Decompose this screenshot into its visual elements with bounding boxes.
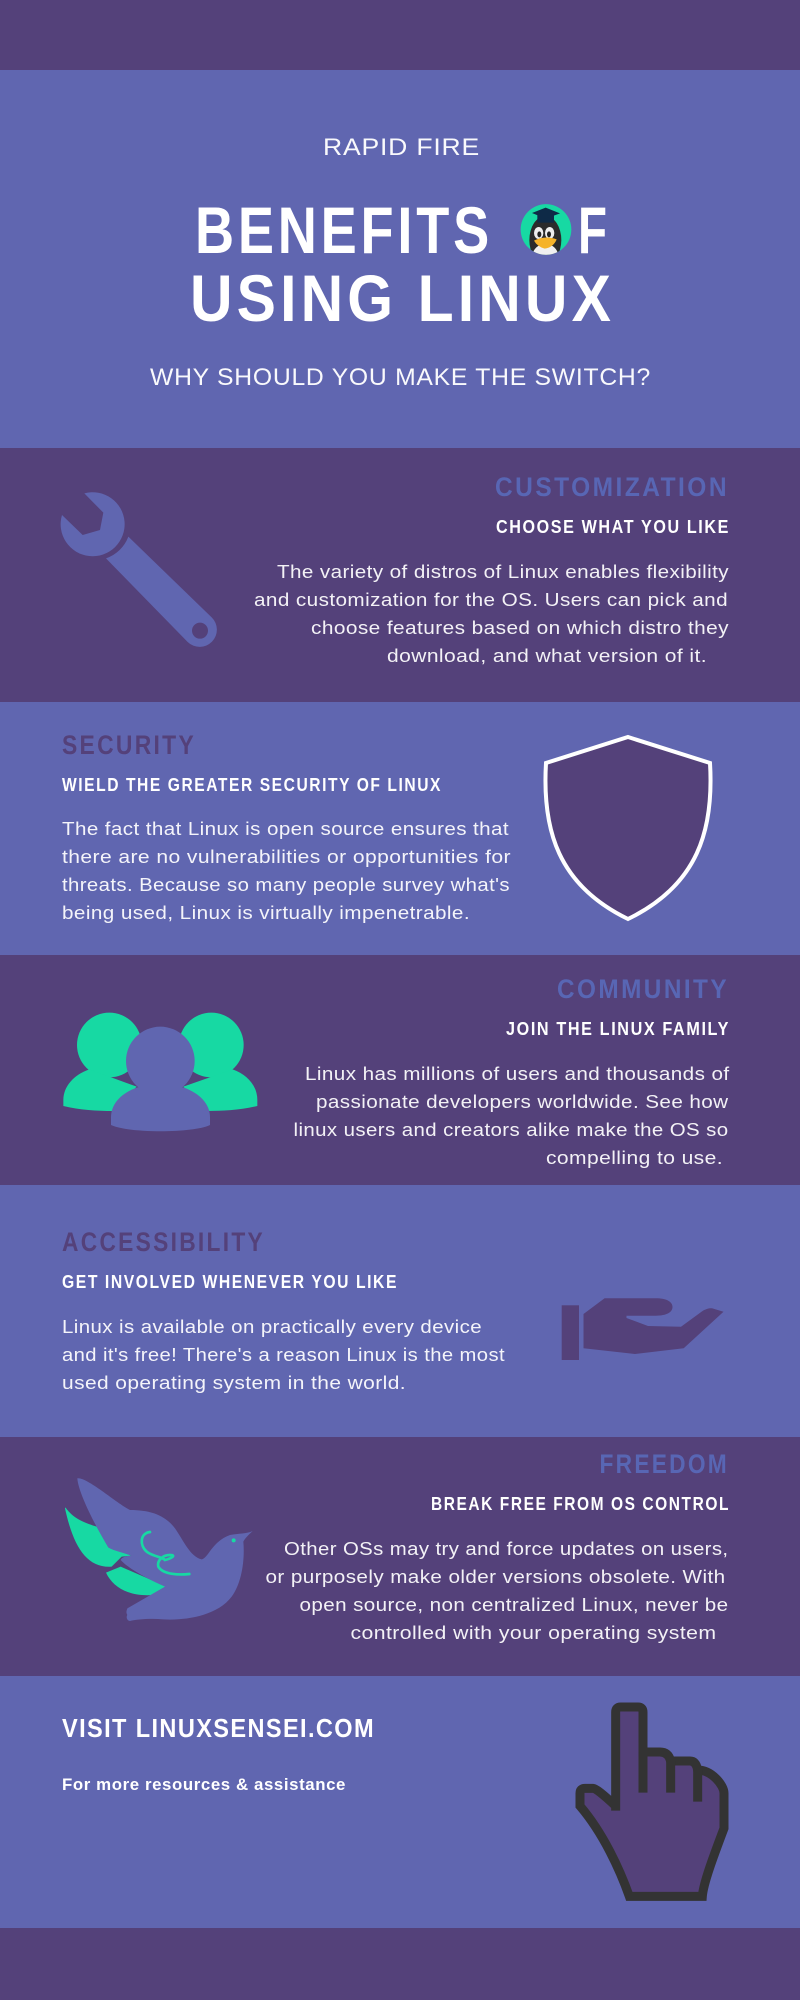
body text: download, and what version of it.	[387, 645, 707, 666]
body text	[62, 1316, 505, 1393]
body text: controlled with your operating system	[350, 1622, 716, 1643]
body text: Other OSs may try and force updates on users,	[284, 1538, 728, 1559]
body text: open source, non centralized Linux, never be	[300, 1594, 728, 1615]
body text: used operating system in the world.	[62, 1372, 406, 1393]
body text	[266, 1538, 728, 1643]
subheading: CHOOSE WHAT YOU LIKE	[496, 517, 730, 537]
body text: choose features based on which distro they	[311, 617, 729, 638]
body text: linux users and creators alike make the OS so	[294, 1119, 728, 1140]
body text: or purposely make older versions obsolete. With	[266, 1566, 726, 1587]
body text: being used, Linux is virtually impenetrable.	[62, 902, 470, 923]
icon: shield	[545, 737, 711, 919]
heading: visit website: VISIT LINUXSENSEI.COM	[62, 1715, 375, 1743]
subheading: BREAK FREE FROM OS CONTROL	[431, 1494, 730, 1514]
subheading: WIELD THE GREATER SECURITY OF LINUX	[62, 775, 442, 795]
icon: pointing hand	[580, 1707, 724, 1896]
panel: security	[0, 702, 800, 955]
body text: passionate developers worldwide. See how	[316, 1091, 729, 1112]
eyebrow: rapid fire: RAPID FIRE	[323, 134, 480, 161]
heading: customization: CUSTOMIZATION	[495, 472, 729, 502]
body text	[62, 818, 511, 923]
subheading: GET INVOLVED WHENEVER YOU LIKE	[62, 1272, 398, 1292]
panel: call to action	[0, 1676, 800, 1928]
body text: and customization for the OS. Users can pick and	[254, 589, 728, 610]
title	[194, 204, 610, 322]
icon: open hand	[562, 1298, 724, 1360]
body text: The variety of distros of Linux enables flexibility	[277, 561, 729, 582]
heading: community: COMMUNITY	[557, 974, 729, 1004]
body text: there are no vulnerabilities or opportunities for	[62, 846, 511, 867]
icon: penguin with graduation cap	[520, 204, 572, 255]
heading: security: SECURITY	[62, 730, 196, 760]
panel: customization	[0, 448, 800, 702]
supporting text: For more resources & assistance	[62, 1775, 346, 1794]
body text: Linux is available on practically every device	[62, 1316, 482, 1337]
heading: accessibility: ACCESSIBILITY	[62, 1227, 265, 1257]
subtitle: WHY SHOULD YOU MAKE THE SWITCH?	[150, 364, 651, 391]
icon: group of people	[63, 1013, 257, 1131]
body text: threats. Because so many people survey what's	[62, 874, 510, 895]
body text: compelling to use.	[546, 1147, 723, 1168]
panel: accessibility	[0, 1185, 800, 1437]
panel: community	[0, 955, 800, 1185]
icon: dove	[65, 1478, 253, 1621]
body text: The fact that Linux is open source ensures that	[62, 818, 509, 839]
title: USING LINUX	[190, 261, 615, 335]
icon: wrench	[61, 492, 217, 647]
title: BENEFITS	[195, 193, 493, 267]
subheading: JOIN THE LINUX FAMILY	[506, 1019, 730, 1039]
body text	[254, 561, 729, 666]
panel: hero header	[0, 70, 800, 448]
heading: freedom: FREEDOM	[600, 1449, 729, 1479]
title: F	[578, 193, 607, 267]
body text	[294, 1063, 730, 1168]
panel: freedom	[0, 1437, 800, 1676]
body text: and it's free! There's a reason Linux is the most	[62, 1344, 505, 1365]
body text: Linux has millions of users and thousands of	[305, 1063, 730, 1084]
